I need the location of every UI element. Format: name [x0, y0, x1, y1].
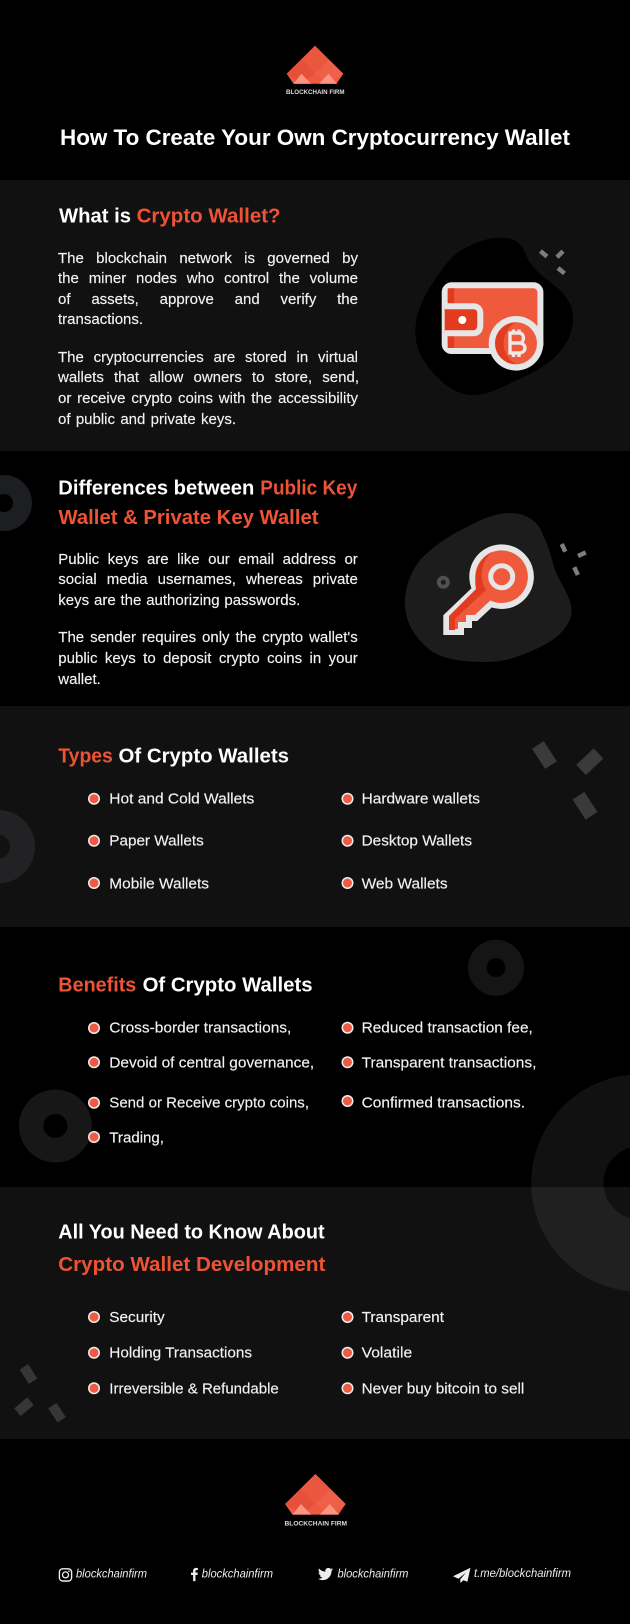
heading: differences between wallets: Differences between	[58, 477, 254, 499]
heading: benefits of crypto wallets	[58, 975, 313, 997]
social: telegram	[453, 1568, 571, 1583]
text block: public keys paragraph: social media usernames, whereas private	[58, 571, 358, 588]
heading: differences between wallets	[58, 477, 358, 529]
decorative shards: section three right	[532, 741, 603, 820]
social: twitter: blockchainfirm	[338, 1569, 409, 1581]
heading: benefits of crypto wallets: Of Crypto Wallets	[143, 975, 313, 997]
list: development facts	[88, 1309, 524, 1397]
item: hot and cold wallets: Hot and Cold Wallets	[109, 790, 254, 807]
text block: public keys paragraph: Public keys are like our email address or	[58, 550, 358, 568]
text block: crypto wallet governance paragraph	[58, 250, 358, 328]
list: types of wallets	[88, 790, 480, 892]
decorative donut: section three left	[0, 810, 35, 883]
text block: public keys paragraph	[58, 550, 358, 609]
heading: types of crypto wallets: Of Crypto Wallets	[118, 745, 289, 767]
heading: what is crypto wallet	[59, 206, 281, 228]
text block: crypto wallet storage paragraph	[58, 349, 359, 428]
panel: what is crypto wallet background	[0, 180, 630, 451]
text block: sender paragraph	[58, 629, 358, 688]
item: never buy bitcoin to sell: Never buy bitcoin to sell	[362, 1380, 524, 1397]
panel: types background	[0, 706, 630, 927]
panel: footer background	[0, 1439, 630, 1624]
decorative shards: section five left	[14, 1364, 66, 1423]
decorative donut: section two left	[0, 475, 32, 531]
item: security: Security	[109, 1309, 165, 1326]
text block: sender paragraph: public keys to deposit crypto coins in your	[58, 650, 358, 667]
text block: public keys paragraph: keys are the authorizing passwords.	[58, 592, 300, 609]
text block: crypto wallet storage paragraph: of public and private keys.	[58, 411, 236, 428]
list: benefits	[88, 1020, 536, 1147]
icon: wallet with bitcoin coin on black blob	[415, 238, 573, 395]
item: devoid of central governance: Devoid of central governance,	[109, 1055, 314, 1072]
heading: all you need to know	[58, 1221, 326, 1276]
decorative donut: large right straddling sections	[531, 1074, 630, 1292]
item: web wallets: Web Wallets	[362, 875, 448, 892]
heading: differences between wallets: Wallet & Private Key Wallet	[58, 507, 319, 529]
panel: differences background	[0, 451, 630, 706]
heading: what is crypto wallet: What is	[59, 206, 131, 228]
text block: crypto wallet storage paragraph: or receive crypto coins with the accessibility	[58, 390, 358, 407]
item: volatile	[342, 1345, 412, 1362]
logo: Blockchain Firm top: BLOCKCHAIN FIRM	[286, 89, 345, 96]
title: How To Create Your Own Cryptocurrency Wallet	[60, 125, 570, 150]
item: trading: Trading,	[109, 1130, 164, 1147]
item: transparent transactions: Transparent transactions,	[362, 1055, 536, 1072]
item: confirmed transactions: Confirmed transactions.	[362, 1094, 525, 1111]
social: instagram: blockchainfirm	[76, 1569, 147, 1581]
text block: crypto wallet storage paragraph: wallets that allow owners to store, send,	[58, 369, 359, 386]
panel: development background	[0, 1187, 630, 1439]
item: desktop wallets: Desktop Wallets	[362, 833, 472, 850]
icon: key on dark blob	[405, 513, 587, 662]
decorative donut: benefits left	[19, 1090, 92, 1162]
logo: Blockchain Firm footer	[284, 1474, 347, 1527]
item: transparent: Transparent	[362, 1309, 445, 1326]
item: volatile: Volatile	[362, 1345, 412, 1362]
text block: crypto wallet storage paragraph: The cryptocurrencies are stored in virtual	[58, 349, 358, 366]
panel: header background	[0, 0, 630, 180]
item: send or receive crypto coins: Send or Receive crypto coins,	[109, 1094, 309, 1111]
item: holding transactions: Holding Transactions	[109, 1345, 252, 1362]
heading: differences between wallets: Public Key	[260, 477, 358, 499]
item: paper wallets: Paper Wallets	[109, 833, 204, 850]
logo: Blockchain Firm footer: BLOCKCHAIN FIRM	[284, 1520, 347, 1527]
text block: crypto wallet governance paragraph: of assets, approve and verify the	[58, 291, 358, 308]
item: reduced transaction fee: Reduced transaction fee,	[362, 1020, 533, 1037]
decorative donut: benefits top right	[468, 940, 524, 996]
item: hardware wallets: Hardware wallets	[362, 790, 480, 807]
item: cross-border transactions: Cross-border transactions,	[109, 1020, 291, 1037]
panel: benefits background	[0, 927, 630, 1187]
heading: what is crypto wallet: Crypto Wallet?	[137, 206, 281, 228]
text block: crypto wallet governance paragraph: the miner nodes who control the volume	[58, 270, 358, 287]
text block: crypto wallet governance paragraph: transactions.	[58, 311, 143, 328]
social: telegram: t.me/blockchainfirm	[474, 1568, 571, 1580]
heading: all you need to know: All You Need to Know About	[58, 1221, 325, 1243]
text block: crypto wallet governance paragraph: The blockchain network is governed by	[58, 250, 358, 266]
item: mobile wallets: Mobile Wallets	[109, 875, 209, 892]
logo: Blockchain Firm top	[286, 46, 345, 96]
text block: sender paragraph: The sender requires only the crypto wallet's	[58, 629, 358, 646]
heading: types of crypto wallets: Types	[58, 745, 113, 767]
social: facebook: blockchainfirm	[202, 1569, 273, 1581]
heading: benefits of crypto wallets: Benefits	[58, 975, 136, 997]
item: irreversible and refundable: Irreversible & Refundable	[109, 1380, 279, 1397]
heading: all you need to know: Crypto Wallet Development	[58, 1254, 326, 1276]
text block: sender paragraph: wallet.	[58, 670, 101, 688]
